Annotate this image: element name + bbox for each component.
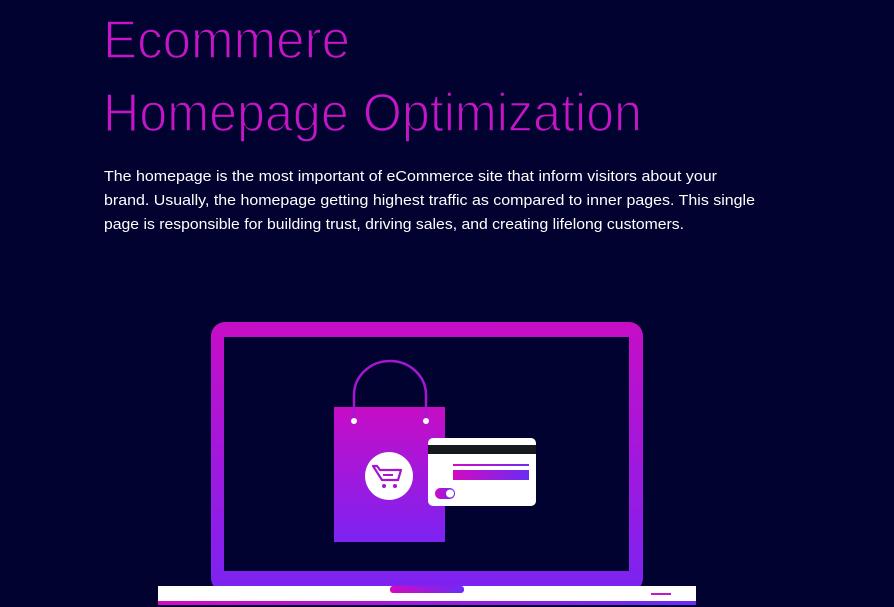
laptop illustration xyxy=(158,322,696,605)
title xyxy=(103,10,642,143)
icon: credit card xyxy=(428,438,536,506)
intro paragraph: brand. Usually, the homepage getting highest traffic as compared to inner pages. This single xyxy=(104,193,755,209)
laptop base xyxy=(158,586,696,605)
laptop frame xyxy=(211,322,643,592)
icon: cart xyxy=(365,452,413,500)
intro paragraph: page is responsible for building trust, driving sales, and creating lifelong customers. xyxy=(104,217,684,233)
intro paragraph: The homepage is the most important of eCommerce site that inform visitors about your xyxy=(104,169,717,185)
laptop screen xyxy=(224,337,629,571)
title: Ecommere xyxy=(103,10,350,70)
icon: shopping bag xyxy=(334,361,445,542)
intro paragraph xyxy=(104,169,755,233)
title: Homepage Optimization xyxy=(103,83,642,143)
